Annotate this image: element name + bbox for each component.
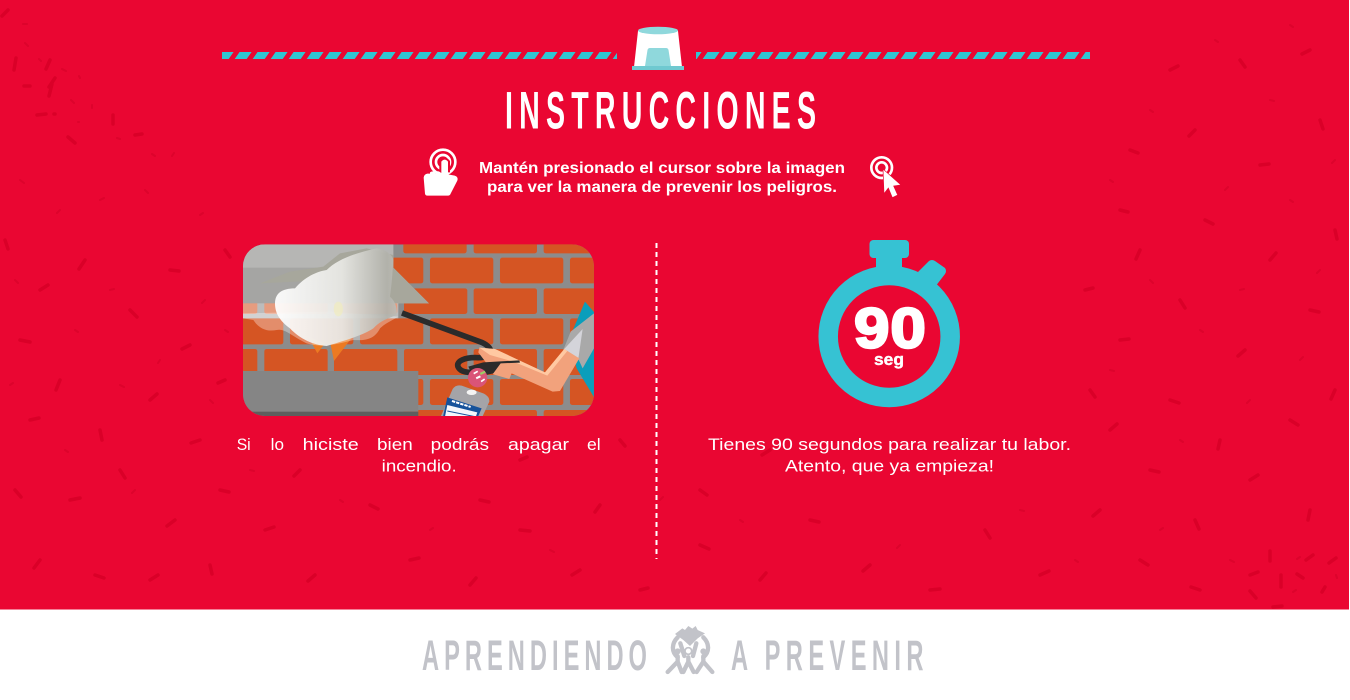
- caption left: apagar: [508, 435, 569, 454]
- illustration: putting out the fire: [243, 244, 594, 416]
- instruction text: para ver la manera de prevenir los peligros.: [487, 179, 837, 196]
- caption right: Tienes 90 segundos para realizar tu labor.: [708, 435, 1071, 454]
- caption right: Atento, que ya empieza!: [785, 457, 994, 476]
- timer value: 9: [854, 296, 890, 360]
- extractor hood: [243, 244, 429, 318]
- dashed stripes header: [222, 52, 1090, 59]
- nozzle: [468, 368, 487, 387]
- caption left: el: [587, 435, 601, 454]
- caption left: [237, 435, 601, 476]
- instruction text: Mantén presionado el cursor sobre la imagen: [479, 160, 845, 177]
- icon: touch hand: [424, 150, 458, 196]
- caption right: [708, 435, 1071, 476]
- trigger: [468, 360, 520, 376]
- caption left: bien: [377, 435, 413, 454]
- footer text: a prevenir: A PREVENIR: [731, 633, 924, 680]
- low smoke: [243, 312, 398, 345]
- caption left: lo: [271, 435, 284, 454]
- extinguisher: [440, 385, 489, 418]
- caption left: incendio.: [382, 457, 457, 476]
- footer bar: [0, 610, 1350, 700]
- footer text: aprendiendo: APRENDIENDO: [422, 633, 647, 680]
- timer value: 0: [890, 296, 926, 360]
- flames: [312, 338, 351, 361]
- stopwatch: [828, 240, 950, 398]
- sleeve and shirt: [563, 302, 594, 397]
- hose: [402, 313, 491, 372]
- instruction text: [479, 160, 845, 196]
- icon: stool: [632, 27, 684, 70]
- fire glow: [334, 302, 343, 316]
- title: INSTRUCCIONES: [505, 81, 816, 141]
- timer unit: seg: [874, 351, 904, 369]
- vertical dashed divider: [656, 243, 658, 559]
- counter: [243, 371, 418, 417]
- icon: people holding puzzle: [668, 626, 712, 672]
- brick wall: [243, 244, 594, 416]
- icon: cursor click: [871, 157, 901, 198]
- caption left: podrás: [431, 435, 489, 454]
- arm and hand: [478, 348, 579, 392]
- caption left: hiciste: [303, 435, 359, 454]
- caption left: Si: [237, 435, 251, 454]
- smoke cloud: [275, 248, 397, 346]
